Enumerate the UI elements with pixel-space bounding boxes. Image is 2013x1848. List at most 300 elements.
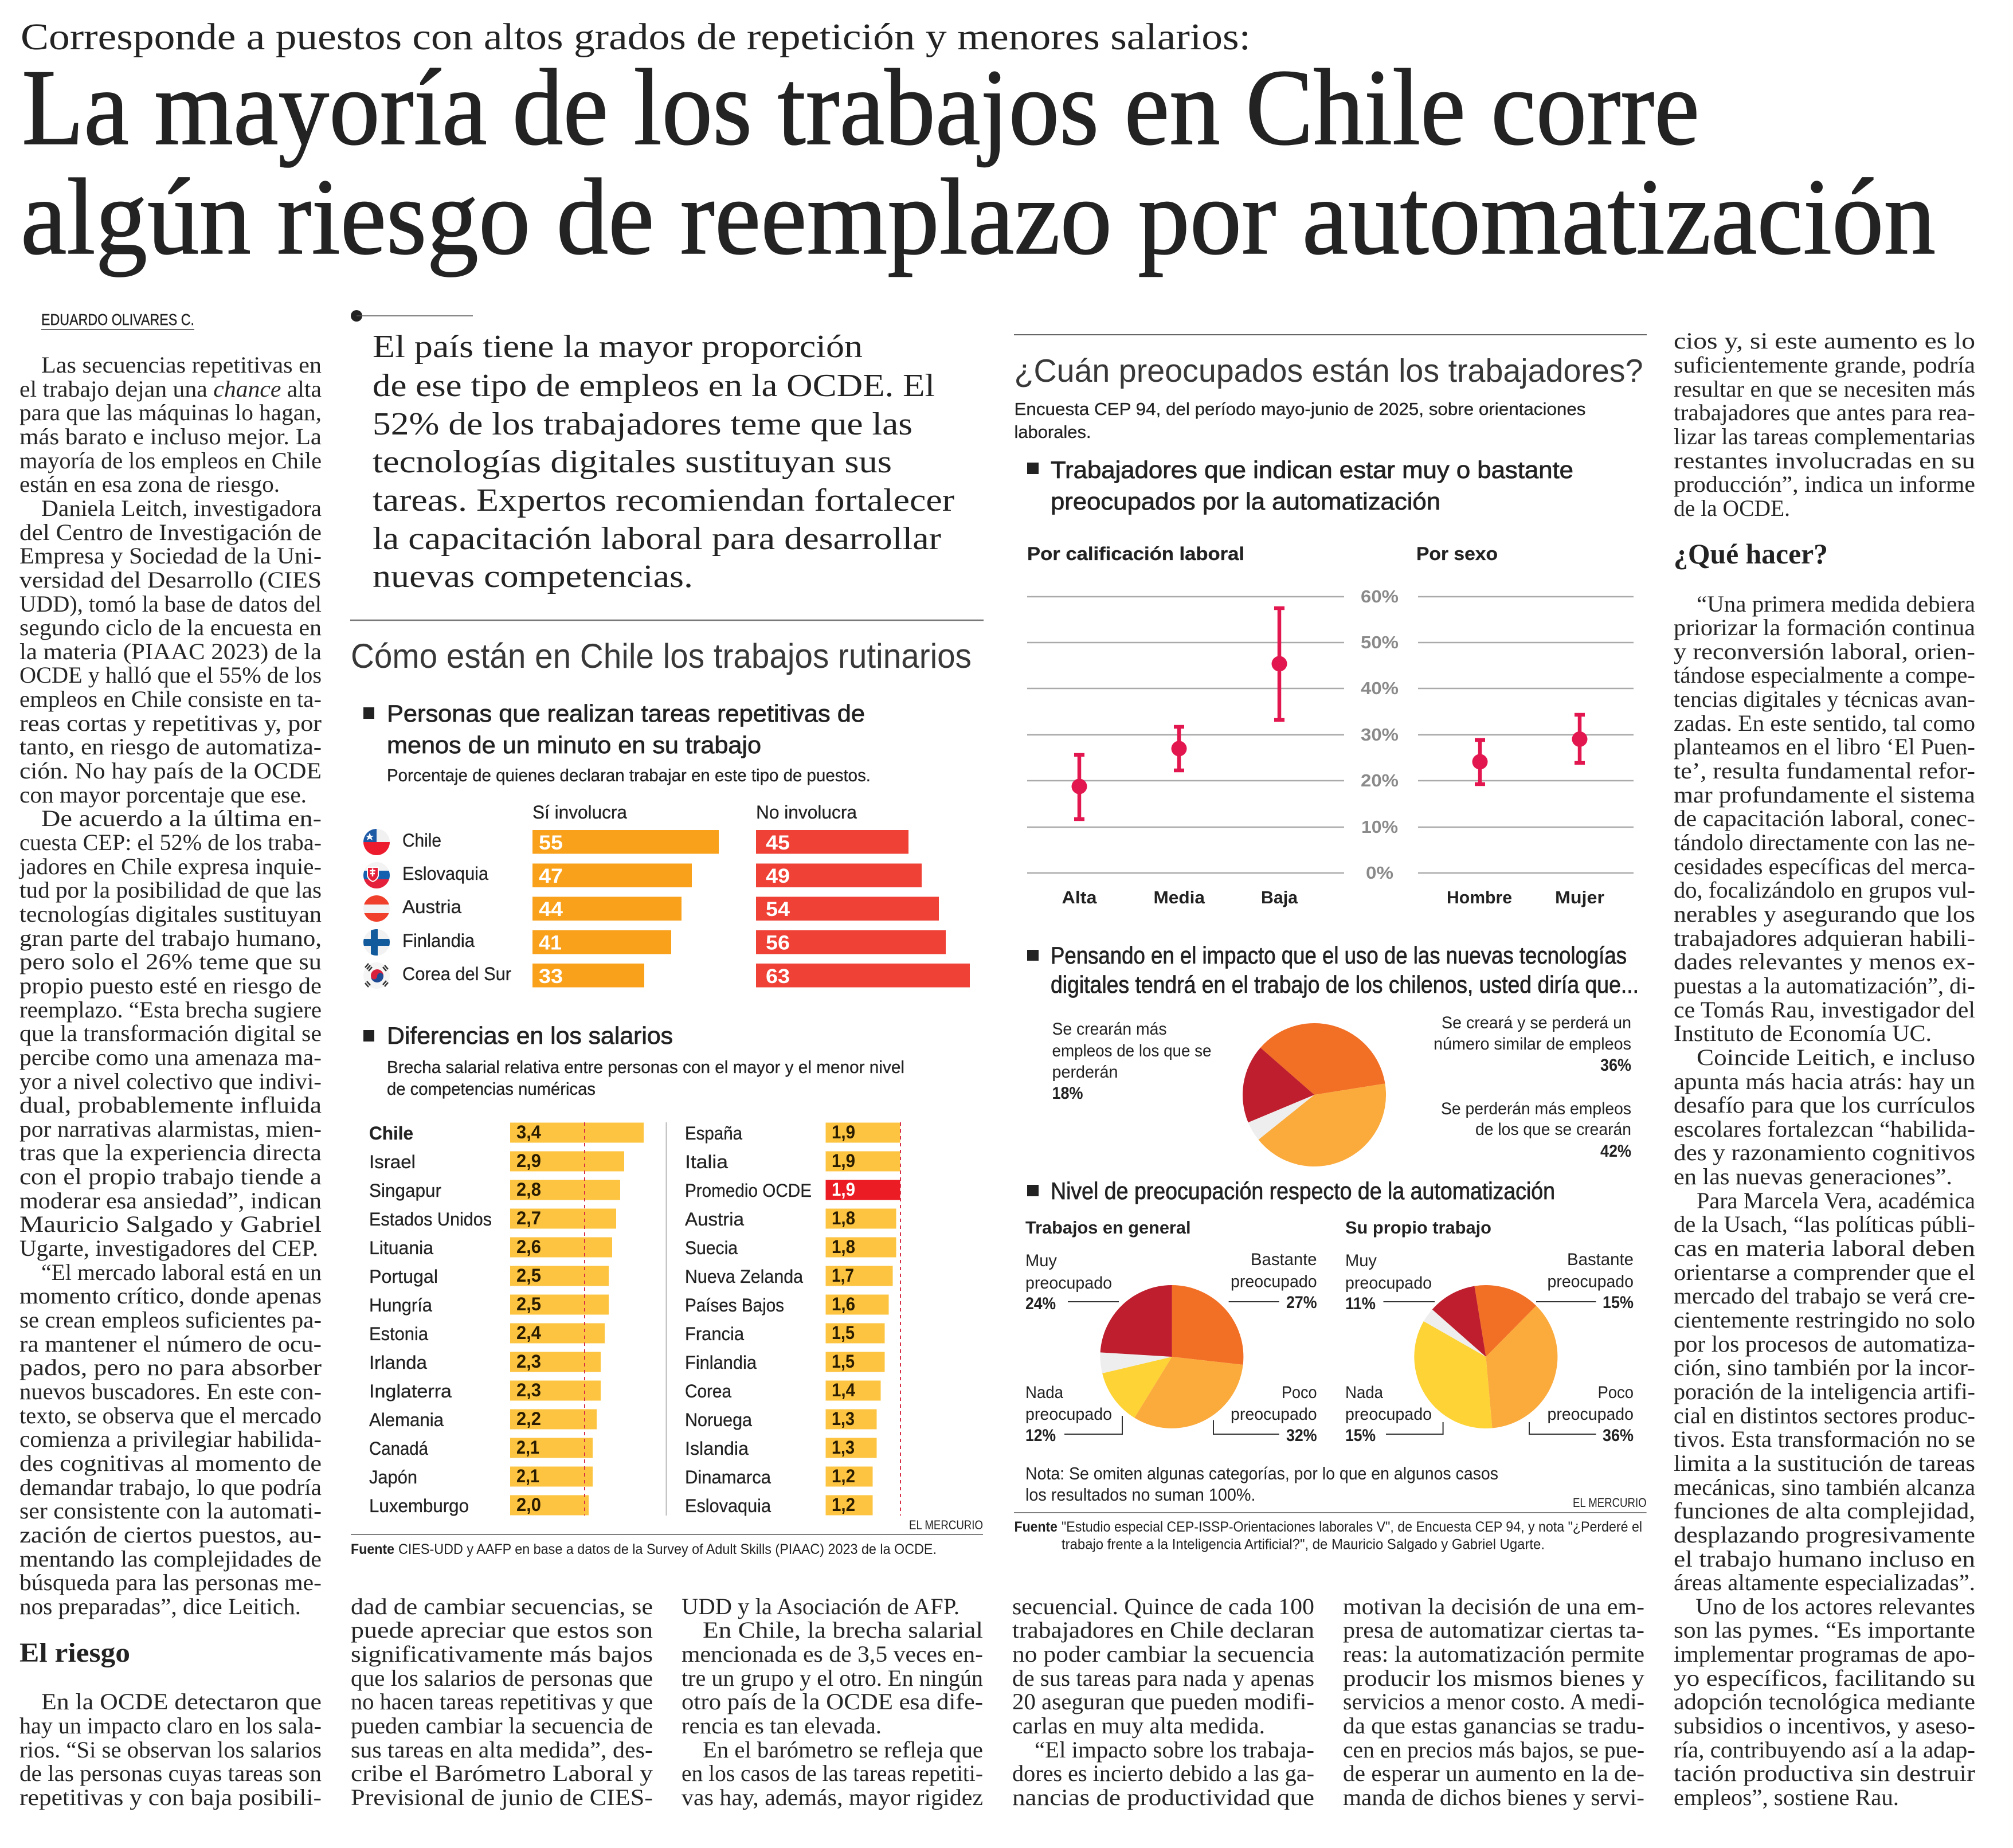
text block: article column 1: Mauricio Salgado y Gabriel xyxy=(19,1211,322,1237)
text block: article column 1: ser consistente con la automati- xyxy=(19,1498,322,1524)
text block: article column 3: vas hay, además, mayor rigidez xyxy=(682,1784,983,1810)
country labels: Eslovaquia xyxy=(402,863,488,884)
labels: Su propio trabajo: Muy xyxy=(1345,1251,1377,1270)
bar chart: brecha salarial column 1 xyxy=(369,1122,644,1516)
title: algún riesgo de reemplazo por automatización xyxy=(21,157,1936,277)
text block: article column 1: con mayor porcentaje que ese. xyxy=(19,782,307,808)
bar chart: brecha salarial column 1: Irlanda xyxy=(369,1352,427,1373)
section heading: tareas repetitivas: Personas que realizan tareas repetitivas de xyxy=(387,700,865,727)
bar chart: brecha salarial column 2: Suecia xyxy=(685,1238,738,1258)
text block: article column 6 continued: tivos. Esta transformación no se xyxy=(1674,1426,1975,1452)
bar chart: brecha salarial column 2: 1,6 xyxy=(832,1294,855,1314)
text block: article column 1: dual, probablemente influida xyxy=(19,1092,322,1118)
text block: article column 3: En el barómetro se refleja que xyxy=(703,1737,983,1763)
bar chart: Sí involucra: 33 xyxy=(539,965,563,988)
bar chart: brecha salarial column 2: 1,5 xyxy=(832,1322,855,1343)
bar chart: brecha salarial column 2: Países Bajos xyxy=(685,1295,784,1315)
text block: article column 5: da que estas ganancias se tradu- xyxy=(1343,1713,1644,1739)
text block: article column 6 continued: implementar programas de apo- xyxy=(1674,1641,1975,1667)
bar chart: No involucra: 63 xyxy=(766,965,790,988)
bar chart: brecha salarial column 2: 1,7 xyxy=(832,1265,854,1286)
dot plot with error bars xyxy=(1027,586,1634,907)
source note: "Estudio especial CEP-ISSP-Orientaciones laborales V", de Encuesta CEP 94, y nota "¿Perderé el xyxy=(1062,1519,1642,1535)
bar chart: brecha salarial column 2: 1,8 xyxy=(832,1236,855,1257)
bar chart: brecha salarial column 1: 2,9 xyxy=(516,1150,541,1171)
text block: article column 2: cribe el Barómetro Laboral y xyxy=(351,1760,653,1786)
text block: article column 2: pueden cambiar la secuencia de xyxy=(351,1713,653,1739)
text block: article column 6 top: de la OCDE. xyxy=(1674,495,1790,521)
bar chart: brecha salarial column 2: 1,8 xyxy=(832,1208,855,1228)
text block: article column 6 continued: el trabajo humano incluso en xyxy=(1674,1546,1975,1572)
labels: Su propio trabajo: Poco xyxy=(1598,1383,1634,1402)
text block: article column 4: trabajadores en Chile declaran xyxy=(1012,1617,1314,1643)
y axis labels: 60% xyxy=(1361,586,1399,606)
text block: article column 6 continued xyxy=(1674,591,1975,1810)
text block: article column 4: dores es incierto debido a las ga- xyxy=(1012,1760,1314,1786)
chart title: Por sexo: Por sexo xyxy=(1416,543,1498,564)
y axis labels: 50% xyxy=(1361,632,1399,652)
text block: article column 1: que la transformación digital se xyxy=(19,1020,322,1046)
text block: article column 6 top xyxy=(1674,328,1975,521)
text block: article column 3: rencia es tan elevada. xyxy=(682,1713,882,1739)
text block: article column 1: por narrativas alarmistas, mien- xyxy=(19,1116,322,1142)
text block: article column 6 continued: poración de la inteligencia artifi- xyxy=(1674,1379,1975,1404)
label: 18%: 18% xyxy=(1052,1084,1083,1103)
bar chart: brecha salarial column 1: Hungría xyxy=(369,1295,432,1315)
bar chart: brecha salarial column 2: Eslovaquia xyxy=(685,1495,771,1516)
text block: article column 6 continued: mercado del trabajo se verá cre- xyxy=(1674,1283,1975,1309)
point: Baja xyxy=(1271,608,1287,720)
bar chart: brecha salarial column 1: Portugal xyxy=(369,1266,438,1287)
labels: Su propio trabajo: 15% xyxy=(1603,1293,1634,1312)
panel heading: ¿Cuán preocupados están los trabajadores? xyxy=(1015,353,1643,389)
labels: Su propio trabajo: Bastante xyxy=(1567,1250,1634,1269)
bar chart: brecha salarial column 2: 1,2 xyxy=(832,1494,855,1515)
text block: article column 1: tecnologías digitales sustituyan xyxy=(19,901,322,927)
text block: article column 1 xyxy=(18,352,322,1619)
text block: article column 6 continued: puestas a la automatización”, di- xyxy=(1674,973,1975,999)
text block: article column 1: segundo ciclo de la encuesta en xyxy=(19,614,322,640)
standfirst text: tareas. Expertos recomiendan fortalecer xyxy=(373,483,954,518)
text block: article column 6 continued: desafío para que los currículos xyxy=(1674,1092,1975,1118)
bar chart: brecha salarial column 2: 1,9 xyxy=(832,1122,855,1142)
text block: article column 2: dad de cambiar secuencias, se xyxy=(351,1593,653,1619)
bar chart: Sí involucra: 44 xyxy=(539,898,563,921)
labels: Trabajos en general: 32% xyxy=(1286,1426,1317,1445)
labels: Su propio trabajo: Nada xyxy=(1345,1383,1383,1402)
text block: article column 6 continued: cientemente restringido no solo xyxy=(1674,1307,1975,1333)
text block: article column 2: sus tareas en alta medida”, des- xyxy=(351,1737,653,1763)
icon: flag of Slovakia xyxy=(363,862,390,888)
label: 36%: número similar de empleos xyxy=(1434,1035,1631,1054)
text block: article column 6 continued: priorizar la formación continua xyxy=(1674,614,1975,640)
bar chart: brecha salarial column 2: 1,9 xyxy=(832,1179,855,1200)
labels: Su propio trabajo: 11% xyxy=(1345,1294,1376,1313)
text block: article column 3: otro país de la OCDE esa dife- xyxy=(682,1689,983,1714)
text block: article column 5: producir los mismos bienes y xyxy=(1343,1665,1644,1691)
labels: Su propio trabajo xyxy=(1345,1250,1634,1445)
text block: article column 6 continued: “Una primera medida debiera xyxy=(1697,591,1975,617)
label: 42% xyxy=(1441,1099,1631,1161)
standfirst marker xyxy=(351,310,473,322)
bar chart: No involucra: 56 xyxy=(766,932,790,954)
labels: Trabajos en general: preocupado xyxy=(1231,1273,1317,1291)
bar chart: brecha salarial column 2: 1,2 xyxy=(832,1466,855,1486)
byline: EDUARDO OLIVARES C. xyxy=(41,311,194,328)
text block: article column 2: no hacen tareas repetitivas y que xyxy=(351,1689,653,1714)
x axis labels xyxy=(1062,887,1604,907)
bar chart: No involucra: 49 xyxy=(766,865,790,887)
country labels: Corea del Sur xyxy=(402,964,511,984)
bar chart: brecha salarial column 2: Promedio OCDE xyxy=(685,1180,812,1201)
source note: CIES-UDD y AAFP en base a datos de la Survey of Adult Skills (PIAAC) 2023 de la OCDE. xyxy=(398,1541,937,1557)
text block: article column 1 continued: hay un impacto claro en los sala- xyxy=(19,1713,322,1739)
y axis labels: 30% xyxy=(1361,725,1399,745)
text block: article column 4: secuencial. Quince de cada 100 xyxy=(1012,1593,1314,1619)
text block: article column 6 top: resultar en que se necesiten más xyxy=(1674,376,1975,402)
text block: article column 6 continued: tación productiva sin destruir xyxy=(1674,1760,1975,1786)
text block: article column 6 continued: en las nuevas generaciones”. xyxy=(1674,1164,1952,1189)
text block: article column 1: comienza a privilegiar habilida- xyxy=(19,1426,322,1452)
note: los resultados no suman 100%. xyxy=(1025,1485,1255,1505)
text block: article column 6 continued: tándolo directamente con las ne- xyxy=(1674,829,1975,855)
standfirst text: la capacitación laboral para desarrollar xyxy=(373,521,941,557)
panel description xyxy=(1015,399,1585,442)
bar chart: brecha salarial column 1: 2,8 xyxy=(516,1179,541,1200)
text block: article column 1: des cognitivas al momento de xyxy=(19,1450,322,1476)
country labels: Chile xyxy=(402,830,441,851)
standfirst text: 52% de los trabajadores teme que las xyxy=(373,406,912,442)
text block: article column 6 top: cios y, si este aumento es lo xyxy=(1674,328,1975,354)
panel: ¿Cuán preocupados están los trabajadores? xyxy=(1014,353,1647,1552)
panel heading: Cómo están en Chile los trabajos rutinarios xyxy=(351,637,972,675)
text block: article column 6 top: lizar las tareas complementarias xyxy=(1674,424,1975,449)
text block: article column 1: más barato e incluso mejor. La xyxy=(19,424,322,449)
bar chart: brecha salarial column 1: 2,3 xyxy=(516,1351,541,1372)
labels: Su propio trabajo: preocupado xyxy=(1345,1405,1432,1424)
text block: article column 6 continued: dades relevantes y menos ex- xyxy=(1674,949,1975,974)
text block: article column 3: mencionada es de 3,5 veces en- xyxy=(682,1641,983,1667)
text block: article column 6 continued: yo específicos, facilitando su xyxy=(1674,1665,1975,1691)
bar chart: brecha salarial column 2: 1,3 xyxy=(832,1437,855,1458)
text block: article column 4: 20 aseguran que pueden modifi- xyxy=(1012,1689,1314,1714)
text block: article column 5: reas: la automatización permite xyxy=(1343,1641,1644,1667)
text block: article column 6 continued: ción, sino también por la incor- xyxy=(1674,1354,1975,1380)
text block: article column 4: “El impacto sobre los trabaja- xyxy=(1035,1737,1314,1763)
bar chart: Sí involucra: 41 xyxy=(539,932,562,954)
icon: flag of Austria xyxy=(363,895,390,922)
text block: article column 6 continued: adopción tecnológica mediante xyxy=(1674,1689,1975,1714)
section heading: muy o bastante preocupados xyxy=(1027,456,1573,515)
bar chart: brecha salarial column 1: 2,0 xyxy=(516,1494,541,1515)
text block: article column 5 xyxy=(1343,1593,1644,1810)
x axis labels: Media xyxy=(1153,887,1205,907)
text block: article column 1: gran parte del trabajo humano, xyxy=(19,925,322,951)
labels: Trabajos en general: preocupado xyxy=(1231,1405,1317,1424)
standfirst text: tecnologías digitales sustituyan sus xyxy=(373,444,892,480)
text block: article column 1: ra mantener el número de ocu- xyxy=(19,1331,322,1357)
chart description: de competencias numéricas xyxy=(387,1079,596,1099)
source note: Fuente xyxy=(351,1541,394,1557)
bar chart: brecha salarial column 1: 2,1 xyxy=(516,1437,539,1458)
label: 36%: 36% xyxy=(1600,1056,1631,1075)
pie chart: Su propio trabajo xyxy=(1414,1285,1557,1428)
icon: flag of South Korea xyxy=(363,962,390,989)
label: 42%: 42% xyxy=(1600,1142,1631,1161)
text block: article column 6 continued: ce Tomás Rau, investigador del xyxy=(1674,997,1975,1023)
pie chart: Trabajos en general xyxy=(1100,1285,1243,1428)
icon: flag of Finland xyxy=(363,929,390,956)
text block: article column 3: tre un grupo y el otro. En ningún xyxy=(682,1665,983,1691)
text block: article column 1: percibe como una amenaza ma- xyxy=(19,1044,322,1070)
section heading: impacto de tecnologías digitales xyxy=(1027,942,1639,998)
text block: article column 4: nancias de productividad que xyxy=(1012,1784,1314,1810)
y axis labels xyxy=(1361,586,1399,883)
bar chart: Sí involucra: 55 xyxy=(539,832,563,854)
heading: ¿Qué hacer?: ¿Qué hacer? xyxy=(1674,538,1828,570)
source note xyxy=(1015,1519,1642,1552)
chart description: Brecha salarial relativa entre personas con el mayor y el menor nivel xyxy=(387,1057,904,1077)
text block: article column 1: pero solo el 26% teme que su xyxy=(19,949,322,974)
text block: article column 1: Empresa y Sociedad de la Uni- xyxy=(19,543,322,569)
section heading: tareas repetitivas: menos de un minuto en su trabajo xyxy=(387,731,761,758)
text block: article column 1: reas cortas y repetitivas y, por xyxy=(19,710,322,736)
bar chart: brecha salarial column 1: 2,5 xyxy=(516,1265,541,1286)
bar chart: brecha salarial column 2: España xyxy=(685,1123,742,1144)
bar chart: brecha salarial column 1: Canadá xyxy=(369,1438,428,1459)
text block: article column 1: jadores en Chile expresa inquie- xyxy=(18,853,322,879)
bar chart: brecha salarial column 2: 1,5 xyxy=(832,1351,855,1372)
bar chart: brecha salarial column 1: Japón xyxy=(369,1467,417,1487)
label: 42%: de los que se crearán xyxy=(1475,1120,1631,1139)
text block: article column 1: cuesta CEP: el 52% de los traba- xyxy=(19,829,322,855)
bar chart: brecha salarial column 2: Dinamarca xyxy=(685,1467,771,1487)
bar chart: brecha salarial column 2: Austria xyxy=(685,1209,744,1230)
text block: article column 6 continued: mecánicas, sino también alcanza xyxy=(1674,1474,1975,1500)
bar chart: brecha salarial column 2: 1,4 xyxy=(832,1380,855,1400)
text block: article column 6 continued: cial en distintos sectores produc- xyxy=(1674,1403,1975,1428)
country labels xyxy=(402,830,511,984)
text block: article column 3: UDD y la Asociación de AFP. xyxy=(682,1593,959,1619)
bar chart: brecha salarial column 2: Islandia xyxy=(685,1438,749,1459)
bar chart: brecha salarial column 1: Luxemburgo xyxy=(369,1495,469,1516)
text block: article column 6 top: restantes involucradas en su xyxy=(1674,448,1975,473)
bar chart: No involucra: 54 xyxy=(766,898,790,921)
text block: article column 4: carlas en muy alta medida. xyxy=(1012,1713,1265,1739)
chart description: Porcentaje de quienes declaran trabajar en este tipo de puestos. xyxy=(387,765,871,785)
text block: article column 6 continued: de la Usach, “las políticas públi- xyxy=(1674,1211,1975,1237)
bar chart: brecha salarial column 1: 3,4 xyxy=(516,1122,541,1142)
chart description xyxy=(387,1057,904,1099)
text block: article column 6 continued: Instituto de Economía UC. xyxy=(1674,1020,1932,1046)
text block: article column 6 continued: ría, contribuyendo así a la adap- xyxy=(1674,1737,1975,1763)
text block: article column 5: de esperar un aumento en la de- xyxy=(1343,1760,1644,1786)
text block: article column 3: en los casos de las tareas repetiti- xyxy=(682,1760,983,1786)
label: 36% xyxy=(1434,1013,1631,1075)
label: 18%: empleos de los que se xyxy=(1052,1042,1212,1060)
text block: article column 1: Ugarte, investigadores del CEP. xyxy=(19,1235,318,1261)
panel: Cómo están en Chile los trabajos rutinarios xyxy=(351,637,983,1557)
country labels: Finlandia xyxy=(402,930,475,951)
labels: Su propio trabajo: preocupado xyxy=(1548,1405,1634,1424)
credit: El Mercurio: EL MERCURIO xyxy=(1573,1495,1647,1510)
bar chart: brecha salarial column 1: 2,2 xyxy=(516,1408,541,1429)
text block: article column 1: texto, se observa que el mercado xyxy=(19,1403,322,1428)
text block: article column 1: demandar trabajo, lo que podría xyxy=(19,1474,322,1500)
bar chart: brecha salarial column 1: Lituania xyxy=(369,1238,433,1258)
label: 36%: Se creará y se perderá un xyxy=(1442,1013,1631,1032)
bar chart: brecha salarial column 1: Singapur xyxy=(369,1180,441,1201)
standfirst text: de ese tipo de empleos en la OCDE. El xyxy=(373,368,935,404)
text block: article column 1: tud por la posibilidad de que las xyxy=(19,877,322,903)
icon: flag of Chile xyxy=(363,829,390,855)
text block: article column 1: el trabajo dejan una chance alta xyxy=(19,376,322,402)
text block: article column 1: momento crítico, donde apenas xyxy=(19,1283,322,1309)
bar chart: brecha salarial column 1: Estonia xyxy=(369,1324,428,1344)
chart title: Por calificación laboral: Por calificación laboral xyxy=(1027,543,1244,564)
text block: article column 1: tanto, en riesgo de automatiza- xyxy=(19,734,322,759)
heading: El riesgo: El riesgo xyxy=(19,1638,130,1668)
section heading: muy o bastante preocupados: Trabajadores que indican estar muy o bastante xyxy=(1051,456,1573,483)
standfirst text: El país tiene la mayor proporción xyxy=(373,329,863,365)
text block: article column 6 top: suficientemente grande, podría xyxy=(1674,352,1975,378)
labels: Trabajos en general: 24% xyxy=(1025,1294,1056,1313)
section heading: impacto de tecnologías digitales: digitales tendrá en el trabajo de los chilenos, usted diría que... xyxy=(1051,971,1639,998)
text block: article column 6 continued: zadas. En este sentido, tal como xyxy=(1674,710,1975,736)
bar chart: brecha salarial column 1: Estados Unidos xyxy=(369,1209,492,1230)
text block: article column 1 continued: rios. “Si se observan los salarios xyxy=(19,1737,322,1763)
text block: article column 1: OCDE y halló que el 55% de los xyxy=(19,662,322,688)
labels: Su propio trabajo: 15% xyxy=(1345,1426,1376,1445)
text block: article column 6 continued: trabajadores adquieran habili- xyxy=(1674,925,1975,951)
labels: Trabajos en general: preocupado xyxy=(1025,1274,1112,1293)
bar chart: brecha salarial column 1: 2,6 xyxy=(516,1236,541,1257)
text block: article column 1: mayoría de los empleos en Chile xyxy=(19,448,322,473)
bar chart: brecha salarial column 1: 2,7 xyxy=(516,1208,541,1228)
labels: Trabajos en general: Muy xyxy=(1025,1251,1057,1270)
text block: article column 1 continued: En la OCDE detectaron que xyxy=(41,1689,322,1714)
text block: article column 6 top: trabajadores que antes para rea- xyxy=(1674,400,1975,425)
standfirst text xyxy=(373,329,954,594)
text block: article column 3: En Chile, la brecha salarial xyxy=(703,1617,983,1643)
label: 18%: perderán xyxy=(1052,1063,1118,1082)
label: 18% xyxy=(1052,1020,1212,1103)
title xyxy=(21,48,1936,277)
bar chart: brecha salarial column 1: Israel xyxy=(369,1152,416,1172)
bar chart: brecha salarial column 2: Corea xyxy=(685,1381,731,1401)
text block: article column 1: zación de ciertos puestos, au- xyxy=(19,1522,322,1548)
text block: article column 1: nos preparadas”, dice Leitich. xyxy=(19,1593,301,1619)
text block: article column 5: servicios a menor costo. A medi- xyxy=(1343,1689,1644,1714)
column header: No involucra: No involucra xyxy=(756,802,857,823)
labels: Trabajos en general xyxy=(1025,1250,1317,1445)
text block: article column 1: Las secuencias repetitivas en xyxy=(41,352,322,378)
bar chart: brecha salarial column 2: Francia xyxy=(685,1324,744,1344)
bar chart: brecha salarial column 2: Finlandia xyxy=(685,1352,757,1373)
bar chart: brecha salarial column 2: 1,9 xyxy=(832,1150,855,1171)
text block: article column 6 continued: y reconversión laboral, orien- xyxy=(1674,639,1975,664)
text block: article column 6 continued: funciones de alta complejidad, xyxy=(1674,1498,1975,1524)
point: Mujer xyxy=(1572,715,1588,763)
text block: article column 6 continued: limita a la sustitución de tareas xyxy=(1674,1450,1975,1476)
labels: Trabajos en general: Bastante xyxy=(1251,1250,1317,1269)
chart title: Trabajos en general: Trabajos en general xyxy=(1025,1217,1191,1238)
text block: article column 1: propio puesto esté en riesgo de xyxy=(19,973,322,999)
text block: article column 6 continued: orientarse a comprender que el xyxy=(1674,1259,1975,1285)
text block: article column 1: la materia (PIAAC 2023) de la xyxy=(19,639,322,664)
section heading: muy o bastante preocupados: preocupados por la automatización xyxy=(1051,488,1440,515)
standfirst text: nuevas competencias. xyxy=(373,559,693,594)
text block: article column 5: motivan la decisión de una em- xyxy=(1343,1593,1644,1619)
column header: Sí involucra: Sí involucra xyxy=(532,802,627,823)
text block: article column 1: Daniela Leitch, investigadora xyxy=(41,495,322,521)
bar chart: No involucra xyxy=(756,830,970,988)
bar chart: No involucra: 45 xyxy=(766,832,790,854)
y axis labels: 40% xyxy=(1361,678,1399,698)
section heading: impacto de tecnologías digitales: Pensando en el impacto que el uso de las nuevas tecnologías xyxy=(1051,942,1627,969)
text block: article column 1: del Centro de Investigación de xyxy=(19,519,322,545)
point: Media xyxy=(1172,727,1186,770)
text block: article column 1: moderar esa ansiedad”, indican xyxy=(19,1188,322,1213)
text block: article column 1: mentando las complejidades de xyxy=(19,1546,322,1572)
text block: article column 6 continued: Uno de los actores relevantes xyxy=(1695,1593,1975,1619)
bar chart: brecha salarial column 1: Alemania xyxy=(369,1410,444,1430)
labels: Trabajos en general: Nada xyxy=(1025,1383,1063,1402)
bar chart: brecha salarial column 2: Nueva Zelanda xyxy=(685,1266,803,1287)
label: 42%: Se perderán más empleos xyxy=(1441,1099,1631,1118)
bar chart: brecha salarial column 1: Inglaterra xyxy=(369,1381,452,1401)
panel description: Encuesta CEP 94, del período mayo-junio de 2025, sobre orientaciones xyxy=(1015,399,1585,419)
text block: article column 6 continued: tándose especialmente a compe- xyxy=(1674,662,1975,688)
label: 18%: Se crearán más xyxy=(1052,1020,1167,1039)
text block: article column 1: UDD), tomó la base de datos del xyxy=(19,591,322,617)
text block: article column 6 continued: áreas altamente especializadas”. xyxy=(1674,1569,1975,1595)
text block: article column 6 continued: tencias digitales y técnicas avan- xyxy=(1674,686,1975,712)
section heading: tareas repetitivas xyxy=(363,700,865,758)
text block: article column 1: con el propio trabajo tiende a xyxy=(19,1164,322,1189)
text block: article column 4: de sus tareas para nada y apenas xyxy=(1012,1665,1314,1691)
text block: article column 5: cen en precios más bajos, se pue- xyxy=(1343,1737,1644,1763)
country labels: Austria xyxy=(402,896,461,917)
bar chart: brecha salarial column 1: 2,5 xyxy=(516,1294,541,1314)
text block: article column 1: empleos en Chile consiste en ta- xyxy=(19,686,322,712)
section heading: Diferencias en los salarios: Diferencias en los salarios xyxy=(387,1022,673,1049)
text block: article column 6 continued: te’, resulta fundamental refor- xyxy=(1674,758,1975,784)
x axis labels: Baja xyxy=(1261,887,1298,907)
text block: article column 6 continued: Coincide Leitich, e incluso xyxy=(1697,1044,1975,1070)
text block: article column 1: búsqueda para las personas me- xyxy=(19,1569,322,1595)
text block: article column 2: Previsional de junio de CIES- xyxy=(351,1784,653,1810)
text block: article column 5: manda de dichos bienes y servi- xyxy=(1343,1784,1644,1810)
text block: article column 1: De acuerdo a la última en- xyxy=(41,805,322,831)
text block: article column 6 continued: desplazando progresivamente xyxy=(1674,1522,1975,1548)
bar chart: Sí involucra: 47 xyxy=(539,865,563,887)
text block: article column 6 continued: des y razonamiento cognitivos xyxy=(1674,1140,1975,1165)
text block: article column 6 continued: subsidios o incentivos, y aseso- xyxy=(1674,1713,1975,1739)
text block: article column 6 continued: escolares fortalezcan “habilida- xyxy=(1674,1116,1975,1142)
text block: article column 1: reemplazo. “Esta brecha sugiere xyxy=(19,997,322,1023)
text block: article column 6 continued: cas en materia laboral deben xyxy=(1674,1235,1975,1261)
x axis labels: Mujer xyxy=(1555,887,1604,907)
source note: Fuente xyxy=(1015,1519,1058,1535)
text block: article column 1 continued: repetitivas y con baja posibili- xyxy=(19,1784,322,1810)
text block: article column 6 continued: apunta más hacia atrás: hay un xyxy=(1674,1068,1975,1094)
point: Hombre xyxy=(1472,740,1488,784)
pie chart: impacto en el empleo xyxy=(1243,1023,1386,1166)
x axis labels: Hombre xyxy=(1447,887,1512,907)
subtitle: Corresponde a puestos con altos grados de repetición y menores salarios: xyxy=(21,16,1251,58)
text block: article column 2: significativamente más bajos xyxy=(351,1641,653,1667)
